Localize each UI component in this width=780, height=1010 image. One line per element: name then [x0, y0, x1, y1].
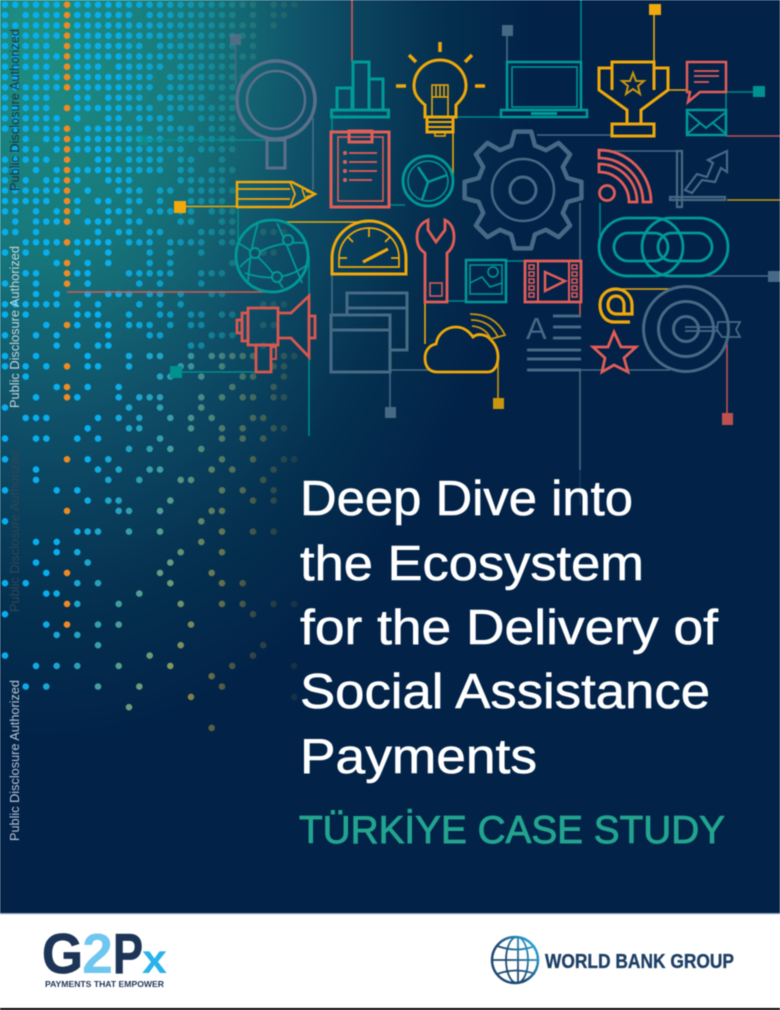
fading grey line	[579, 470, 581, 505]
icon: at sign	[600, 289, 632, 322]
icon: pie chart	[403, 156, 453, 206]
amber squares	[174, 4, 661, 213]
icon: laptop	[501, 62, 587, 117]
orange dot column	[64, 5, 70, 625]
icon: pencil	[237, 182, 315, 207]
grey-blue connectors	[236, 36, 768, 470]
watermark 4: Public Disclosure Authorized	[8, 680, 22, 841]
logo: G2Px: G	[42, 922, 83, 986]
logo: G2Px: x	[142, 936, 167, 982]
logo: G2Px: P	[113, 922, 143, 986]
icon: growth chart	[670, 151, 727, 207]
icon: bar chart	[332, 62, 388, 117]
icon: clipboard	[331, 131, 389, 207]
logo: World Bank Group	[492, 937, 734, 983]
lower scattered dots	[5, 356, 294, 728]
grey squares	[385, 25, 780, 418]
watermark 1: Public Disclosure Authorized	[8, 29, 22, 191]
red connectors	[67, 0, 580, 317]
signal arcs	[470, 314, 505, 339]
title: for the Delivery of	[300, 601, 718, 655]
watermark labels	[8, 29, 22, 841]
icon: speech bubble	[687, 62, 726, 102]
footer band	[0, 913, 780, 1010]
icon: light bulb	[396, 42, 485, 136]
icon: gauge	[332, 221, 406, 274]
faint teal square	[138, 135, 148, 145]
star in trophy	[622, 73, 644, 94]
icon: text document	[526, 311, 581, 370]
connector lines	[67, 0, 780, 505]
icon: cloud	[425, 314, 505, 372]
icon: target with arrow	[644, 286, 740, 372]
dim amber connectors	[498, 200, 780, 398]
dot matrix field	[5, 5, 294, 728]
icon: star	[593, 332, 636, 372]
watermark 2: Public Disclosure Authorized	[8, 246, 22, 408]
icon: film strip	[525, 261, 581, 302]
icon: megaphone	[237, 296, 315, 372]
icon: wrench	[417, 220, 454, 302]
title: Payments	[300, 730, 537, 784]
title: Social Assistance	[300, 665, 710, 719]
icon: magnifying glass	[237, 61, 315, 168]
icon: trophy	[599, 62, 668, 136]
globe mark	[492, 937, 538, 983]
icon: browser windows	[331, 293, 407, 372]
dim red connectors	[726, 136, 780, 413]
subtitle: TÜRKİYE CASE STUDY	[299, 809, 725, 852]
logo: G2Px	[42, 922, 167, 989]
icon: chain link	[599, 218, 728, 276]
icon: gear	[465, 132, 581, 248]
icon: envelope	[687, 110, 726, 135]
teal connectors	[143, 0, 753, 436]
connector end squares	[138, 4, 780, 425]
teal squares	[170, 86, 765, 378]
icon: photo	[466, 260, 506, 302]
logo: G2Px: 2	[82, 922, 113, 986]
logo: G2Px: PAYMENTS THAT EMPOWER	[45, 979, 164, 989]
watermark 3: Public Disclosure Authorized	[8, 450, 22, 612]
wordmark: WORLD BANK GROUP	[545, 950, 734, 973]
title: Deep Dive into	[300, 472, 633, 526]
amber connectors	[186, 15, 687, 344]
faded purple square	[230, 34, 241, 45]
upper blue dots	[5, 5, 294, 346]
dim amber square	[493, 398, 504, 409]
dim red square	[722, 413, 733, 425]
title: the Ecosystem	[300, 537, 644, 591]
title	[300, 472, 718, 784]
icon: rss feed	[599, 150, 651, 202]
icon: text document: A	[526, 311, 547, 346]
icon: globe network	[236, 220, 308, 292]
